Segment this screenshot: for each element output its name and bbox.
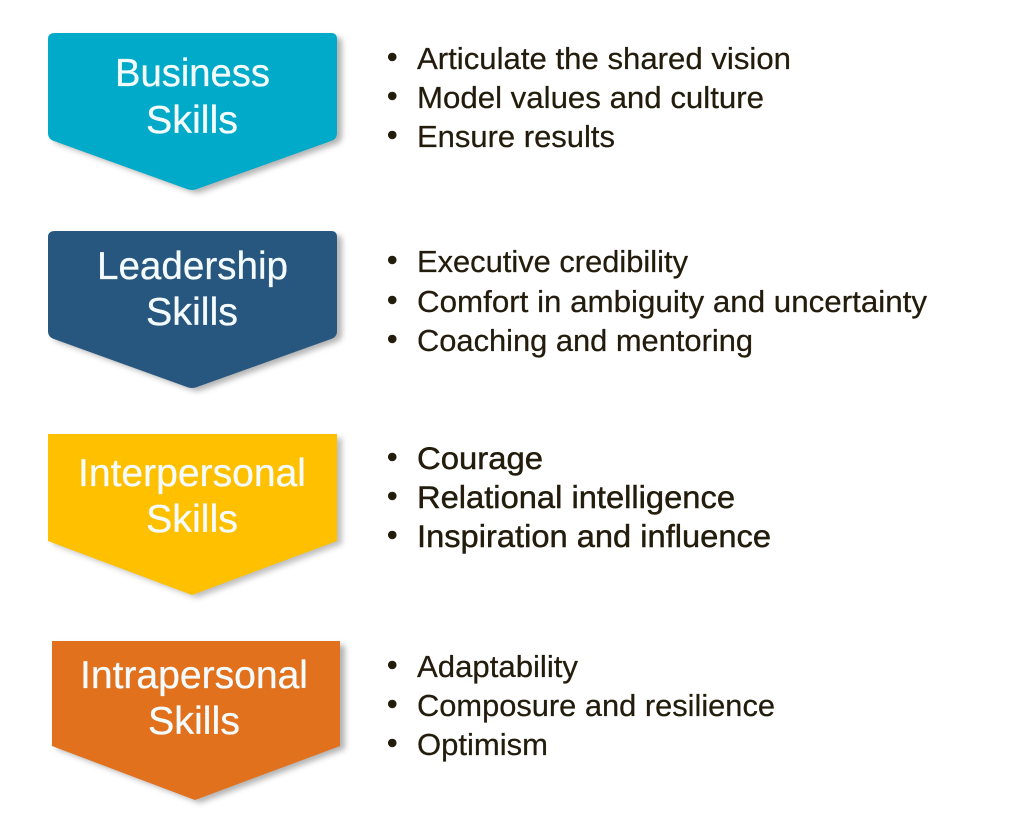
- list: intrapersonal skills: Composure and resilience: [417, 689, 775, 723]
- list: business skills: Articulate the shared vision: [417, 42, 791, 76]
- list: intrapersonal skills: •: [387, 688, 398, 721]
- list: leadership skills: Executive credibility: [417, 245, 689, 279]
- list: interpersonal skills: •: [387, 480, 398, 513]
- list: business skills: •: [387, 80, 398, 113]
- list: leadership skills: •: [387, 323, 398, 356]
- list: interpersonal skills: [387, 440, 771, 554]
- list: leadership skills: Coaching and mentoring: [417, 324, 753, 358]
- list: leadership skills: •: [387, 284, 398, 317]
- panel: leadership skills chevron: Skills: [146, 291, 238, 334]
- list: leadership skills: [387, 244, 928, 358]
- panel: interpersonal skills chevron: Interpersonal: [78, 452, 306, 495]
- list: business skills: Model values and culture: [417, 81, 764, 115]
- panel: interpersonal skills chevron: [48, 434, 342, 598]
- list: intrapersonal skills: •: [387, 727, 398, 760]
- list: business skills: Ensure results: [417, 120, 615, 154]
- list: interpersonal skills: Relational intelligence: [417, 479, 735, 515]
- list: intrapersonal skills: [387, 649, 775, 762]
- list: business skills: •: [387, 119, 398, 152]
- panel: intrapersonal skills chevron: Skills: [148, 700, 240, 743]
- panel: interpersonal skills chevron: Skills: [146, 498, 238, 541]
- list: interpersonal skills: •: [387, 519, 398, 552]
- list: intrapersonal skills: •: [387, 649, 398, 682]
- list: business skills: [387, 41, 791, 154]
- panel: intrapersonal skills chevron: [52, 641, 345, 803]
- panel: business skills chevron: Skills: [146, 99, 238, 142]
- panel: business skills chevron: [48, 33, 342, 193]
- panel: intrapersonal skills chevron: Intrapersonal: [80, 654, 308, 697]
- panel: business skills chevron: Business: [115, 52, 270, 95]
- list: intrapersonal skills: Optimism: [417, 728, 548, 762]
- list: interpersonal skills: Courage: [417, 440, 543, 476]
- list: interpersonal skills: Inspiration and influence: [417, 518, 771, 554]
- list: leadership skills: Comfort in ambiguity and uncertainty: [417, 285, 928, 319]
- list: intrapersonal skills: Adaptability: [417, 650, 579, 684]
- panel: leadership skills chevron: Leadership: [97, 245, 288, 288]
- panel: leadership skills chevron: [48, 231, 342, 391]
- list: leadership skills: •: [387, 244, 398, 277]
- list: business skills: •: [387, 41, 398, 74]
- list: interpersonal skills: •: [387, 441, 398, 474]
